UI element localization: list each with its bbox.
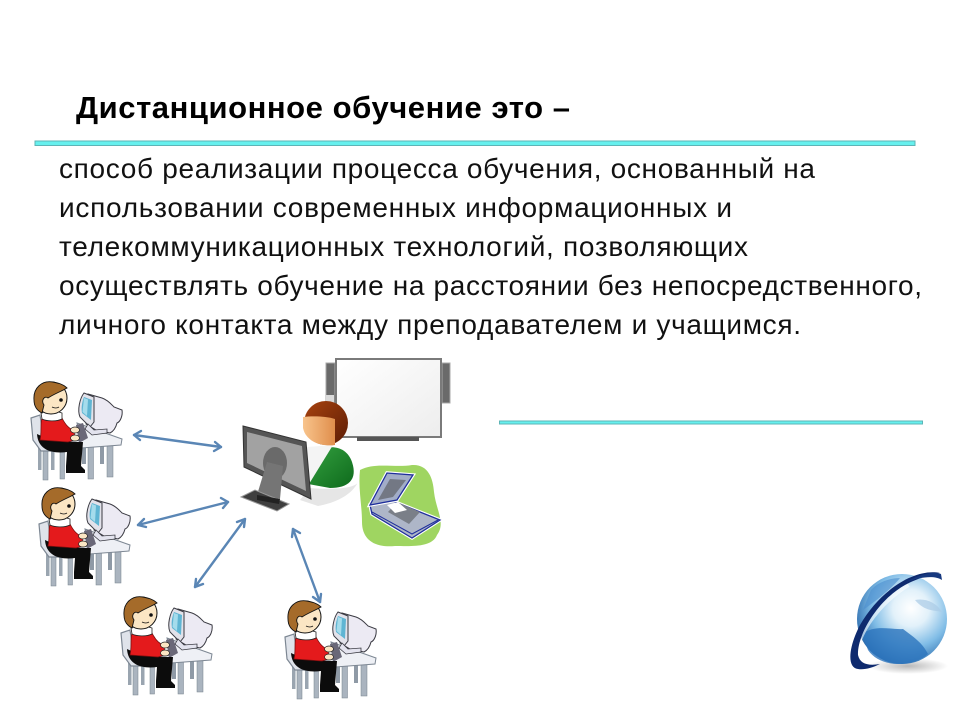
icon: interactive whiteboard — [326, 359, 450, 441]
student workstation 4 — [285, 601, 376, 699]
icon: scanner on green blob — [359, 465, 441, 546]
title: Дистанционное обучение это – — [76, 90, 570, 125]
teacher desk shadow — [300, 482, 358, 506]
arrow to student 1 — [134, 431, 221, 451]
top cyan divider line — [35, 141, 915, 146]
arrows between teacher and students — [134, 431, 321, 602]
student workstation 2 — [39, 488, 130, 586]
icon: teacher at computer — [241, 401, 358, 511]
arrow to student 4 — [292, 529, 321, 602]
definition text block — [59, 153, 922, 340]
teacher body — [307, 447, 354, 488]
definition text block: использовании современных информационных и — [59, 192, 732, 223]
student workstation 1 — [31, 382, 122, 480]
icon: globe with orbit — [850, 572, 948, 674]
student workstation 3 — [121, 597, 212, 695]
arrow to student 3 — [195, 519, 245, 587]
arrow to student 2 — [138, 498, 228, 527]
definition text block: осуществлять обучение на расстоянии без непосредственного, — [59, 270, 922, 301]
teacher head — [303, 401, 348, 445]
computer monitor back — [241, 426, 311, 511]
definition text block: телекоммуникационных технологий, позволяющих — [59, 231, 748, 262]
secondary cyan divider line — [500, 421, 922, 424]
definition text block: способ реализации процесса обучения, основанный на — [59, 153, 815, 184]
definition text block: личного контакта между преподавателем и учащимся. — [59, 309, 801, 340]
